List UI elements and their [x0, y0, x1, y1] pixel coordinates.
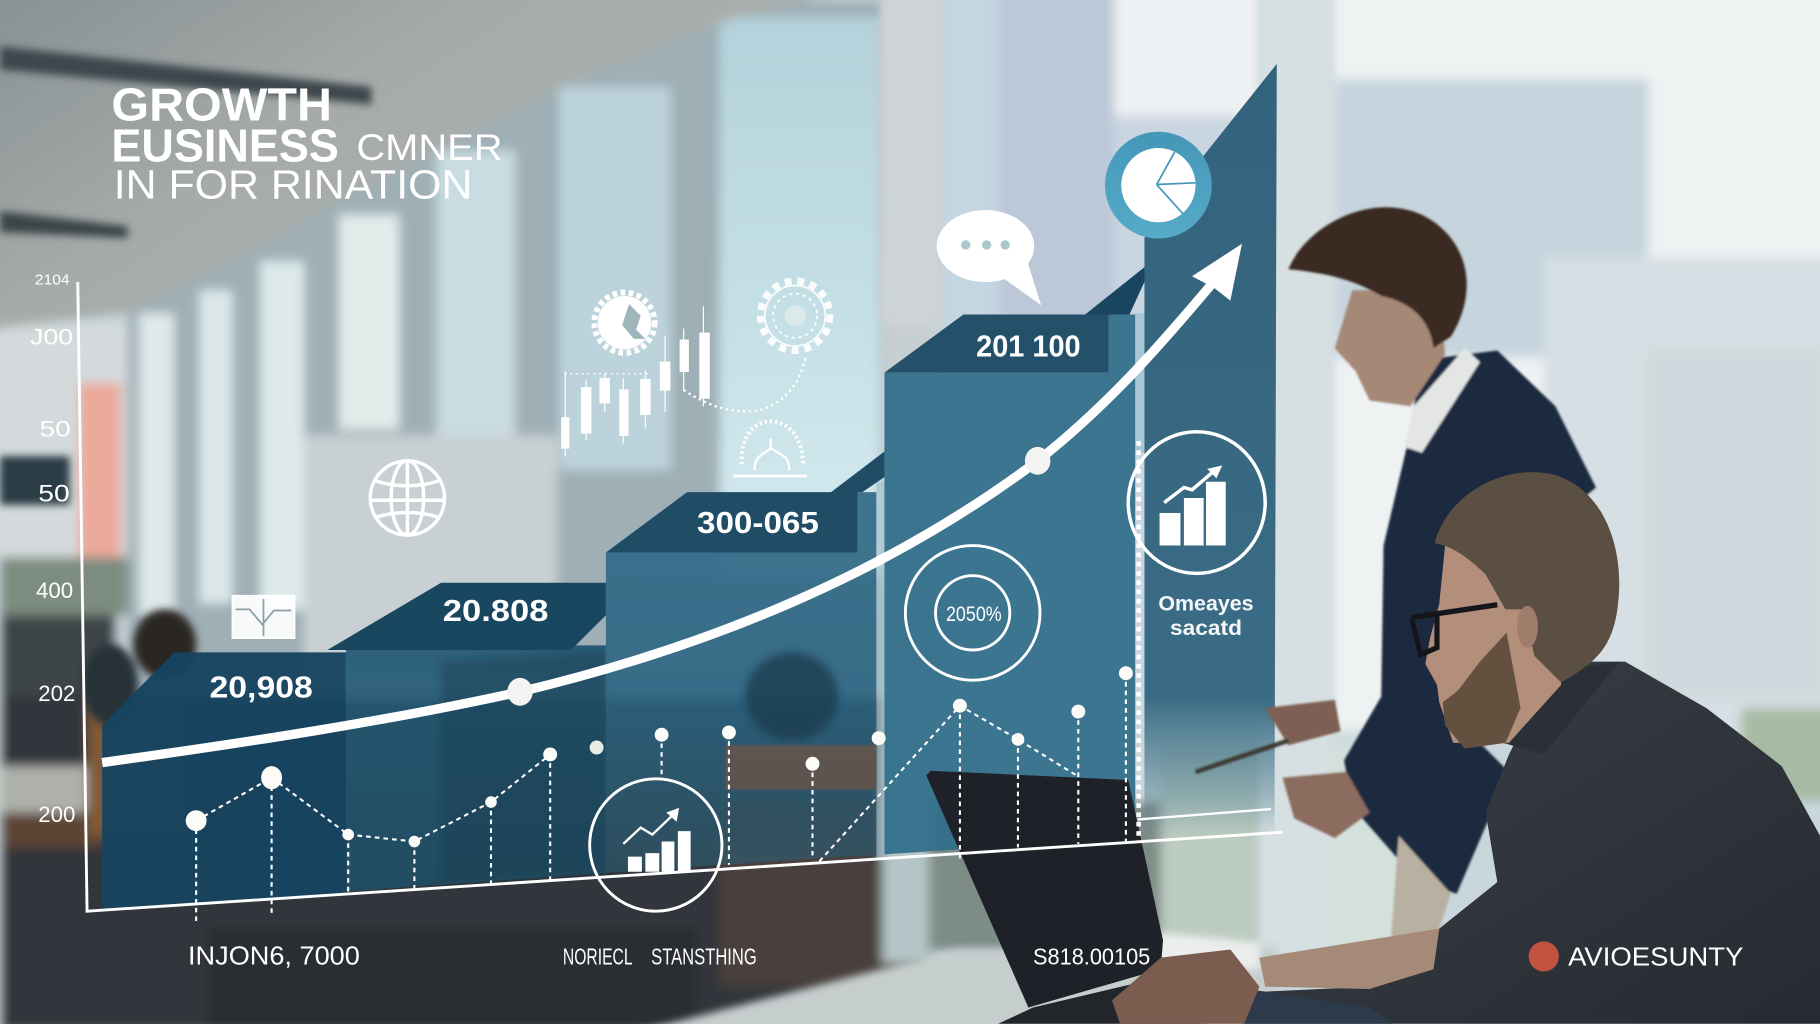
icon: globe [370, 461, 445, 535]
icon: speech bubble [937, 210, 1041, 305]
panel: growth step 5 [1144, 64, 1277, 838]
candlestick chart [562, 306, 806, 456]
icon: gear [760, 281, 830, 351]
bottom labels: STANSTHING [651, 944, 757, 970]
seated man [1112, 472, 1820, 1024]
caption: omeayes sacatd: Omeayes [1158, 593, 1254, 616]
y-axis labels: 200 [38, 802, 75, 827]
standing man [1196, 207, 1596, 946]
dotted line chart [186, 441, 1139, 925]
caption: omeayes sacatd: sacatd [1170, 617, 1242, 640]
icon: framed mini chart [232, 595, 295, 638]
caption: omeayes sacatd [1158, 593, 1254, 640]
title: EUSINESS [111, 119, 339, 171]
y-axis labels: 202 [38, 681, 75, 706]
icon: pie chart badge [1105, 132, 1212, 239]
chart axes [78, 282, 1283, 911]
step value labels: 300-065 [697, 507, 819, 540]
laptop [926, 771, 1207, 1024]
step value labels: 201 100 [976, 330, 1081, 363]
y-axis labels: 50 [39, 416, 71, 441]
y-axis labels [30, 272, 75, 827]
icon: growth bars circle [1128, 432, 1265, 573]
title: CMNER [356, 126, 503, 168]
icon: gear globe [594, 293, 655, 353]
y-axis labels: J00 [30, 325, 73, 350]
panel: growth step 2 [327, 583, 606, 891]
y-axis labels: 50 [38, 480, 70, 507]
icon: percent circle: 2050% [946, 603, 1002, 626]
y-axis labels: 2104 [35, 272, 70, 288]
bottom labels [188, 943, 1150, 971]
y-axis labels: 400 [36, 578, 73, 603]
panel: growth step 4 [884, 259, 1155, 854]
title: GROWTH [111, 79, 332, 131]
step value labels [210, 330, 1081, 705]
panel: growth step 1 [102, 652, 346, 909]
icon: bars in circle bottom [590, 779, 722, 911]
bottom labels: NORIECL [563, 944, 633, 970]
bottom labels: S818.00105 [1033, 944, 1150, 970]
growth curve arrow [102, 244, 1242, 763]
bottom labels: INJON6, 7000 [188, 943, 360, 971]
step value labels: 20.808 [443, 595, 548, 628]
icon: percent circle [905, 546, 1040, 680]
brand logo: AVIOESUNTY [1568, 944, 1743, 972]
brand logo [1529, 941, 1743, 972]
step value labels: 20,908 [210, 672, 313, 705]
icon: dome gauge [734, 421, 807, 476]
title [111, 79, 503, 207]
panel: growth step 3 [606, 452, 886, 873]
title: IN FOR RINATION [114, 161, 472, 207]
